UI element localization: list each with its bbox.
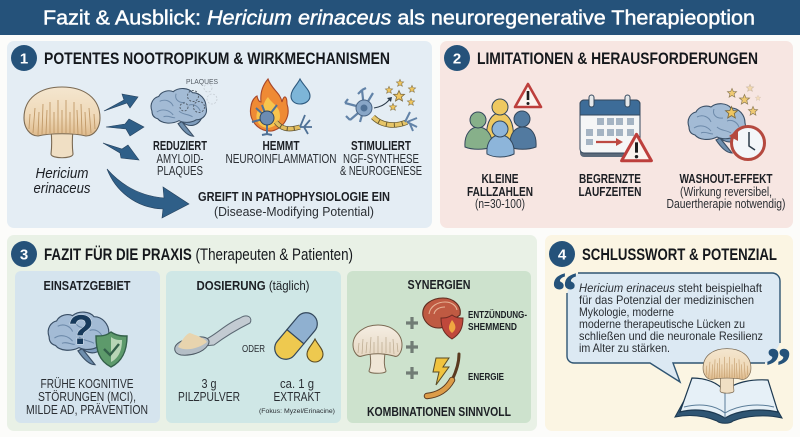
label: Laufzeiten: LAUFZEITEN (578, 185, 642, 199)
badge 2 (444, 45, 470, 71)
sub-panel: Dosierung: ODER (242, 343, 265, 355)
label: entzündungshemmend: SHEMMEND (468, 322, 517, 333)
sub-panel: Dosierung: EXTRAKT (274, 390, 321, 404)
label: Neuroinflammation: HEMMT (262, 139, 300, 153)
icon: brain with clock (688, 84, 764, 160)
quote text: Mykologie, moderne (579, 305, 674, 319)
label: Fallzahlen: (n=30-100) (475, 197, 525, 211)
icon: group with warning (465, 84, 541, 157)
label: disease-modifying: (Disease-Modifying Potential) (214, 205, 374, 219)
label: Fallzahlen: FALLZAHLEN (467, 185, 533, 199)
sub-panel: Dosierung: PILZPULVER (178, 390, 240, 404)
sub-panel: Einsatzgebiet: FRÜHE KOGNITIVE (40, 377, 134, 391)
badge 1: 1 (20, 50, 28, 68)
panel: Potentes Nootropikum (7, 41, 432, 228)
label: Amyloid: AMYLOID- (156, 152, 204, 166)
arrows to mechanisms (103, 94, 144, 160)
sub-panel: Einsatzgebiet: EINSATZGEBIET (44, 279, 131, 293)
label: NGF: STIMULIERT (351, 139, 411, 153)
sub-panel: Synergien: SYNERGIEN (408, 278, 470, 292)
icon: reishi (423, 298, 463, 339)
heading 3: FAZIT FÜR DIE PRAXIS (Therapeuten & Patienten) (44, 245, 353, 264)
panel: Schlusswort (545, 235, 793, 431)
icon: mushroom (353, 325, 402, 373)
quote text: im Alter zu stärken. (579, 341, 670, 355)
label: Washout: (Wirkung reversibel, (680, 185, 772, 199)
sub-panel: Einsatzgebiet: STÖRUNGEN (MCI), (38, 390, 136, 404)
sub-panel: Dosierung (166, 271, 341, 423)
label: entzündungshemmend: ENTZÜNDUNG- (468, 308, 527, 321)
quote marks (552, 262, 791, 393)
label: Fallzahlen (467, 172, 533, 211)
quote marks: “ (552, 262, 577, 318)
heading 1: POTENTES NOOTROPIKUM & WIRKMECHANISMEN (44, 49, 390, 68)
label: Amyloid (153, 139, 207, 178)
sub-panel: Dosierung: 3 g (202, 377, 217, 391)
mushroom label: erinaceus (34, 181, 90, 197)
sub-panel: Dosierung: DOSIERUNG (täglich) (196, 279, 310, 293)
quote text: schließen und die neuronale Resilienz (579, 329, 763, 343)
label: NGF: NGF-SYNTHESE (343, 152, 419, 166)
sub-panel: Dosierung: ca. 1 g (280, 377, 314, 391)
icon: neuron with stars (345, 79, 417, 131)
sub-panel: Einsatzgebiet: MILDE AD, PRÄVENTION (26, 403, 148, 417)
label: Washout (666, 172, 786, 211)
badge 4: 4 (558, 246, 567, 264)
label: Amyloid: REDUZIERT (153, 139, 207, 153)
label: energie: ENERGIE (468, 372, 504, 383)
label: Washout: WASHOUT-EFFEKT (680, 172, 773, 186)
label: disease-modifying (198, 190, 390, 219)
sub-panel: Dosierung: (Fokus: Myzel/Erinacine) (259, 408, 335, 415)
quote text: Hericium erinaceus steht beispielhaft (579, 281, 763, 295)
icon: brain with plaques: PLAQUES (186, 77, 218, 86)
label: disease-modifying: GREIFT IN PATHOPHYSIOLOGIE EIN (198, 190, 390, 204)
mushroom label: Hericium (36, 166, 88, 182)
mushroom label (34, 166, 90, 197)
speech bubble (567, 273, 780, 382)
icon: brain with question mark and shield: ? (68, 306, 94, 353)
icon: mushroom (24, 87, 100, 158)
icon: mushroom on book (703, 349, 751, 393)
quote text: für das Potenzial der medizinischen (579, 293, 754, 307)
label: Neuroinflammation (226, 139, 336, 166)
label: entzündungshemmend (468, 308, 527, 333)
label: Laufzeiten: BEGRENZTE (579, 172, 641, 186)
header bar (0, 0, 800, 35)
title: Fazit & Ausblick: Hericium erinaceus als neuroregenerative Therapieoption (43, 6, 755, 30)
icon: open book (675, 378, 782, 423)
icon: calendar with warning (580, 95, 651, 161)
panel: Limitationen (440, 41, 793, 228)
quote text (579, 281, 763, 355)
badge 2: 2 (453, 50, 461, 68)
badge 3 (11, 241, 37, 267)
panel: Fazit für die Praxis (7, 235, 537, 431)
badge 3: 3 (20, 246, 28, 264)
label: NGF (340, 139, 422, 178)
quote marks: ” (766, 337, 791, 393)
icon: brain with plaques (151, 77, 218, 136)
label: Amyloid: PLAQUES (157, 164, 203, 178)
quote text: moderne therapeutische Lücken zu (579, 317, 745, 331)
curved arrow (107, 169, 189, 218)
icon: flame, drop and neuron (250, 79, 312, 135)
label: Fallzahlen: KLEINE (482, 172, 518, 186)
label: Neuroinflammation: NEUROINFLAMMATION (226, 152, 336, 166)
badge 4 (549, 241, 575, 267)
icon: brain with question mark and shield (48, 306, 127, 367)
icon: spoon with powder (175, 316, 251, 355)
sub-panel: Synergien (347, 271, 531, 423)
sub-panel: Einsatzgebiet (15, 271, 160, 423)
icon: capsule and drop (270, 308, 323, 364)
icon: lightning and cordyceps (427, 354, 459, 396)
sub-panel: Synergien: KOMBINATIONEN SINNVOLL (367, 405, 511, 419)
label: Laufzeiten (578, 172, 642, 199)
badge 1 (11, 45, 37, 71)
label: NGF: & NEUROGENESE (340, 164, 422, 178)
plus signs (406, 317, 418, 379)
